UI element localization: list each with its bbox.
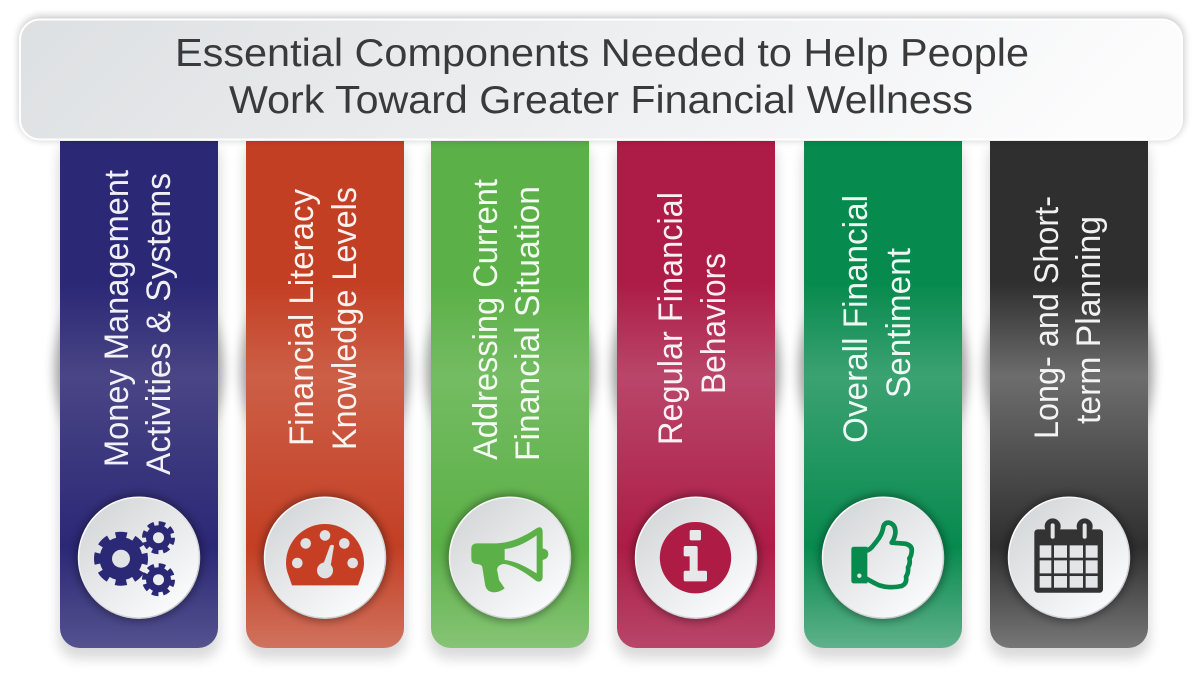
label: regular behaviors bbox=[652, 192, 733, 445]
label: overall sentiment: Sentiment bbox=[880, 247, 918, 398]
label: money management: Activities & Systems bbox=[140, 173, 178, 475]
label: planning: Long- and Short- bbox=[1028, 196, 1066, 439]
title text bbox=[175, 32, 1029, 122]
title text: Work Toward Greater Financial Wellness bbox=[229, 79, 973, 122]
bar: crimson bbox=[617, 141, 775, 648]
bar: charcoal bbox=[990, 141, 1148, 648]
label: current situation bbox=[467, 178, 547, 461]
icon: calendar bbox=[1005, 494, 1133, 622]
label: regular behaviors: Behaviors bbox=[695, 253, 733, 394]
label: overall sentiment: Overall Financial bbox=[837, 195, 875, 443]
bar: emerald bbox=[804, 141, 962, 648]
label: money management bbox=[98, 169, 178, 475]
icon: megaphone bbox=[446, 494, 574, 622]
label: current situation: Addressing Current bbox=[467, 178, 505, 460]
label: financial literacy: Financial Literacy bbox=[283, 189, 321, 446]
label: planning bbox=[1028, 196, 1108, 439]
label: regular behaviors: Regular Financial bbox=[652, 192, 690, 445]
icon: gears bbox=[75, 494, 203, 622]
panel: financial literacy bbox=[241, 141, 409, 659]
bar: red bbox=[246, 141, 404, 648]
label: financial literacy bbox=[283, 187, 364, 450]
panel: overall sentiment bbox=[799, 141, 967, 659]
label: money management: Money Management bbox=[98, 169, 136, 467]
label: current situation: Financial Situation bbox=[509, 186, 547, 461]
bar: green bbox=[431, 141, 589, 648]
icon: thumbs up bbox=[819, 494, 947, 622]
title banner bbox=[19, 16, 1184, 140]
panel: current situation bbox=[426, 141, 594, 659]
label: planning: term Planning bbox=[1070, 216, 1108, 424]
label: financial literacy: Knowledge Levels bbox=[326, 187, 364, 450]
panel: money management bbox=[55, 141, 223, 659]
bar: navy bbox=[60, 141, 218, 648]
label: overall sentiment bbox=[837, 195, 918, 443]
icon: info bbox=[632, 494, 760, 622]
panel: planning bbox=[985, 141, 1153, 659]
panel: regular behaviors bbox=[612, 141, 780, 659]
title text: Essential Components Needed to Help People bbox=[175, 32, 1029, 75]
icon: gauge bbox=[261, 494, 389, 622]
